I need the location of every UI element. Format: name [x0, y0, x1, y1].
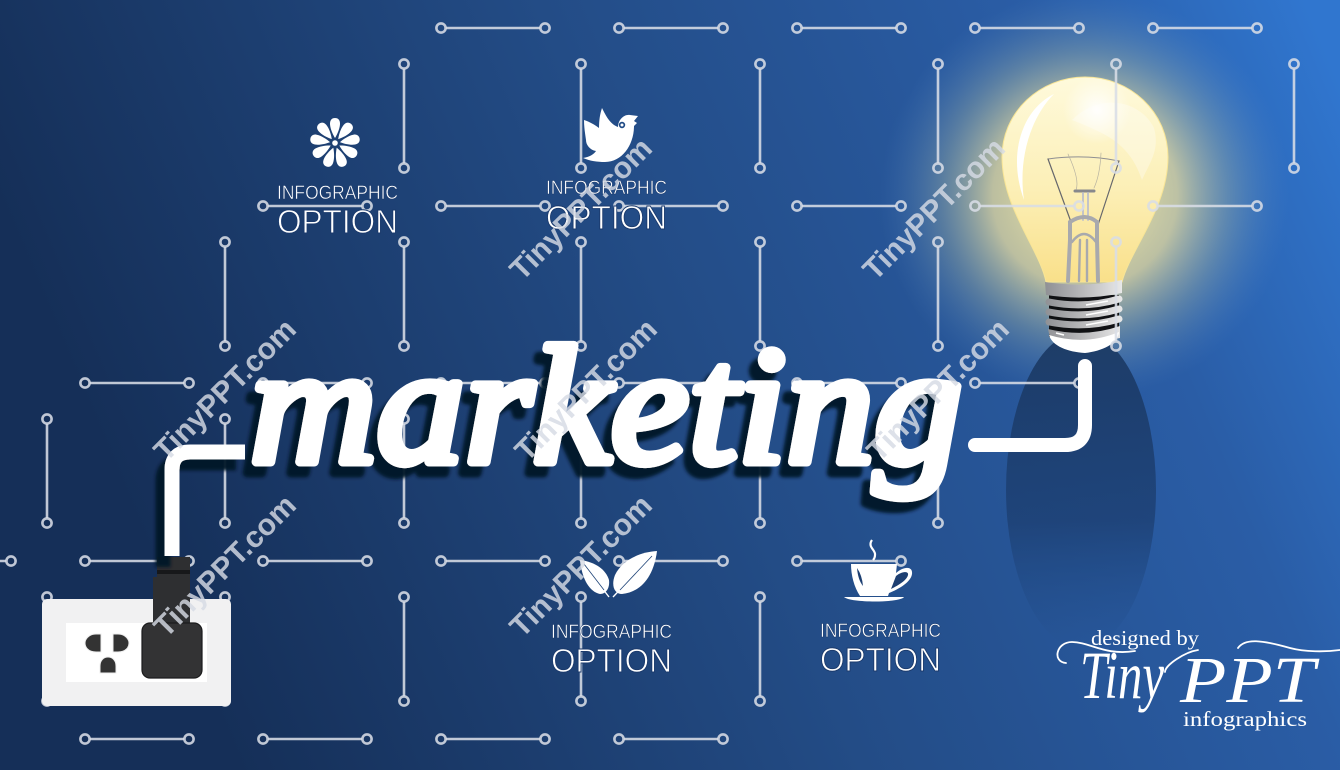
logo: Tiny PPT: PPT [1179, 644, 1320, 717]
cord right to bulb [975, 366, 1085, 445]
option 2: bird [546, 108, 667, 236]
watermarks: TinyPPT.com [504, 489, 659, 644]
watermarks: TinyPPT.com [509, 313, 664, 468]
word: marketing: marketing [250, 313, 962, 499]
icon: leaves [580, 551, 657, 597]
watermarks: TinyPPT.com [857, 132, 1012, 287]
watermarks: TinyPPT.com [861, 313, 1016, 468]
bulb glass [1002, 77, 1168, 282]
logo: Tiny PPT: Tiny [1080, 637, 1165, 713]
plug body [142, 623, 202, 678]
label: INFOGRAPHIC [277, 183, 398, 204]
watermarks [148, 132, 1016, 644]
watermarks: TinyPPT.com [504, 132, 659, 287]
label: INFOGRAPHIC [820, 621, 941, 642]
label large: OPTION [277, 203, 398, 240]
bulb glow [880, 0, 1290, 400]
option 4: coffee cup [820, 540, 941, 678]
socket inner face [66, 623, 207, 682]
logo: designed by: designed by [1091, 626, 1200, 650]
watermarks: TinyPPT.com [148, 313, 303, 468]
label: INFOGRAPHIC [546, 178, 667, 199]
label large: OPTION [551, 642, 672, 679]
label: INFOGRAPHIC [551, 622, 672, 643]
icon: bird [583, 108, 638, 162]
marketing word with power cord [172, 313, 962, 556]
designer logo [1057, 626, 1340, 731]
cord left [172, 452, 245, 556]
logo: Tiny PPT [1057, 637, 1340, 717]
socket holes [85, 634, 129, 673]
watermarks: TinyPPT.com [148, 489, 303, 644]
light bulb [1002, 76, 1168, 353]
power plug [142, 557, 202, 678]
bulb cast shadow [1006, 332, 1156, 648]
option 1: flower [277, 118, 398, 240]
bulb highlights [1017, 76, 1156, 200]
plug neck [153, 557, 190, 625]
filament [1048, 153, 1119, 281]
screw base [1045, 280, 1122, 353]
option 3: leaves [551, 551, 672, 679]
socket plate [42, 599, 231, 706]
label large: OPTION [820, 641, 941, 678]
icon: flower [310, 118, 360, 168]
icon: coffee cup [844, 540, 912, 602]
label large: OPTION [546, 199, 667, 236]
logo: infographics: infographics [1183, 707, 1307, 731]
wall socket [42, 599, 231, 706]
